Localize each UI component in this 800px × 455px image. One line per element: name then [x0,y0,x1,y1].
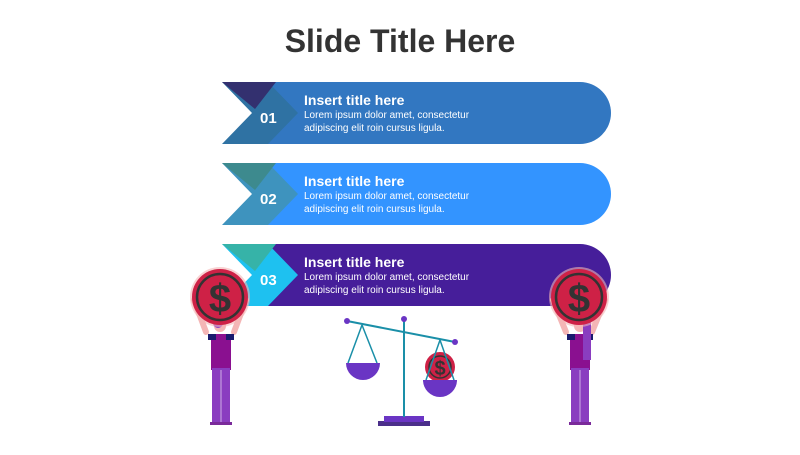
banner 1: 01 [260,110,277,127]
banner 3: adipiscing elit roin cursus ligula. [304,285,445,296]
banner 2: Lorem ipsum dolor amet, consectetur [304,191,470,202]
banner 2: 02 [260,191,277,208]
person left holding coin: $ [209,277,231,321]
banner 1: Lorem ipsum dolor amet, consectetur [304,110,470,121]
banner 1 [222,82,611,144]
banner 2: adipiscing elit roin cursus ligula. [304,204,445,215]
banner 3: Lorem ipsum dolor amet, consectetur [304,272,470,283]
person right holding coin: $ [568,277,590,321]
balance scale: $ [434,358,446,380]
banner 1: adipiscing elit roin cursus ligula. [304,123,445,134]
banner 3: 03 [260,272,277,289]
person right holding coin [549,267,609,425]
balance scale [344,316,458,426]
title: Slide Title Here [285,23,515,59]
banner 2: Insert title here [304,173,405,189]
banner 2 [222,163,611,225]
banner 1: Insert title here [304,92,405,108]
banner 3 [222,244,611,306]
banner 3: Insert title here [304,254,405,270]
person left holding coin [190,267,250,425]
